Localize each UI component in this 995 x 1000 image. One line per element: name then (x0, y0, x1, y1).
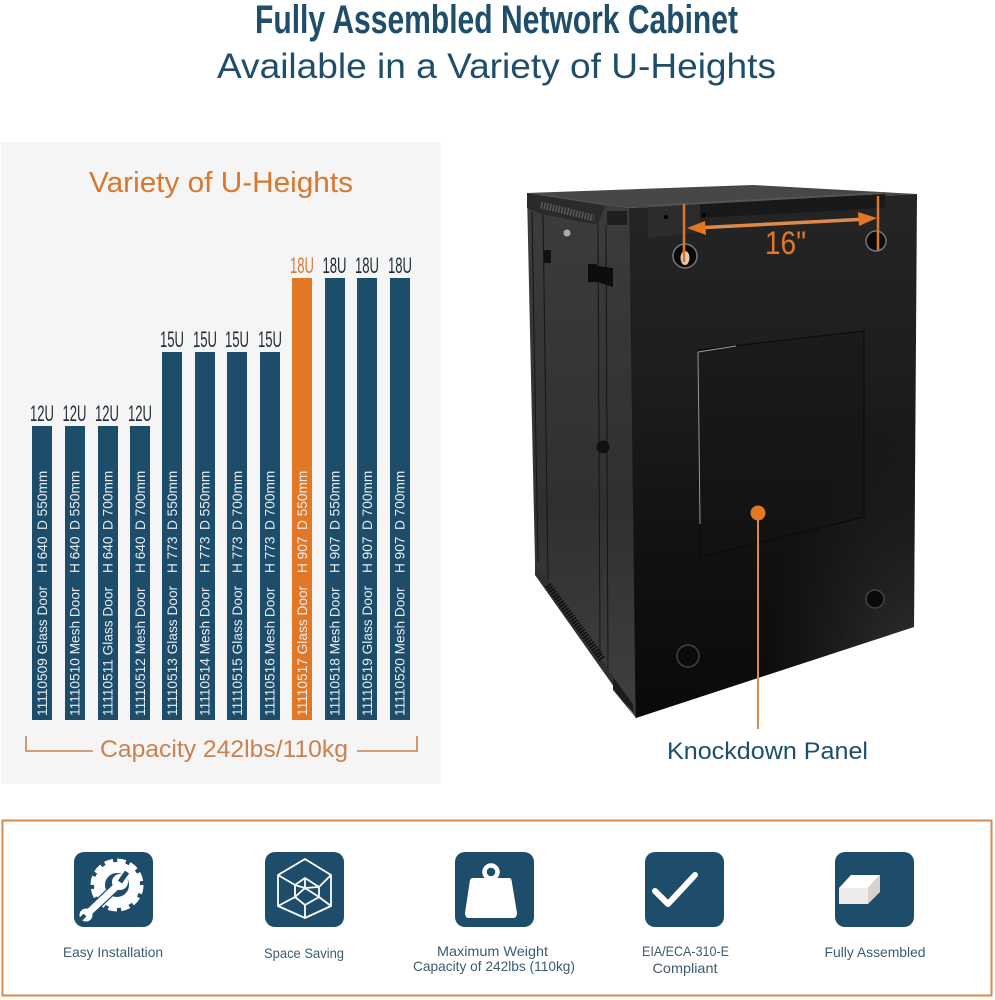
feature: space saving: Space Saving (264, 946, 344, 961)
bar: 11110517 highlighted: 18U (290, 253, 314, 278)
feature: space saving (264, 852, 344, 961)
knockdown panel (698, 331, 864, 557)
cabinet side (527, 193, 636, 718)
bar: 11110519: D 700mm (360, 471, 375, 530)
subtitle: Available in a Variety of U-Heights (217, 47, 776, 86)
bar: 11110519 (355, 253, 379, 720)
bar: 11110517 highlighted: H 907 (295, 536, 310, 573)
bar: 11110510 (62, 401, 86, 720)
mounting bracket (648, 193, 885, 238)
bar: 11110514 (193, 327, 217, 720)
icon: weight (455, 852, 534, 927)
bar: 11110509: D 550mm (35, 471, 50, 530)
bar: 11110520: D 700mm (392, 471, 408, 530)
bar: 11110516: H 773 (262, 536, 278, 573)
bar: 11110509: 12U (30, 401, 54, 426)
bar: 11110515 (225, 327, 249, 720)
bar chart (30, 253, 412, 720)
bar: 11110512: D 700mm (133, 471, 148, 530)
bar: 11110512 (128, 401, 152, 720)
feature: EIA/ECA compliance: Compliant (652, 961, 718, 976)
feature: EIA/ECA compliance (642, 852, 729, 976)
bar: 11110510: 12U (62, 401, 86, 426)
bar: 11110515: 15U (225, 327, 249, 352)
cabinet photo (527, 185, 917, 729)
feature: fully assembled (824, 852, 926, 960)
panel heading: Variety of U-Heights (89, 167, 353, 199)
bar: 11110511: D 700mm (100, 471, 116, 530)
bar: 11110509 (30, 401, 54, 720)
bar: 11110520 (388, 253, 412, 720)
bar: 11110513: H 773 (165, 536, 180, 573)
feature: maximum weight (413, 852, 575, 974)
bar: 11110515: 11110515 Glass Door (230, 585, 245, 716)
icon: gear and wrench (74, 852, 153, 927)
bar: 11110511 (95, 401, 119, 720)
bar: 11110513: 15U (160, 327, 184, 352)
bar: 11110517 highlighted (290, 253, 314, 720)
bar: 11110519: 11110519 Glass Door (360, 585, 375, 716)
feature: fully assembled: Fully Assembled (824, 945, 926, 960)
icon: box (835, 852, 914, 927)
icon: cube (265, 852, 344, 927)
bar: 11110513: 11110513 Glass Door (165, 585, 180, 716)
cabinet rear face (630, 194, 917, 718)
bar: 11110515: D 700mm (230, 471, 245, 530)
bar: 11110511: 12U (95, 401, 119, 426)
bar: 11110520: 11110520 Mesh Door (392, 587, 408, 716)
feature: EIA/ECA compliance: EIA/ECA-310-E (642, 944, 729, 959)
bar: 11110517 highlighted: 11110517 Glass Door (295, 585, 310, 716)
capacity bracket and label: Capacity 242lbs/110kg (100, 736, 348, 763)
feature: easy installation: Easy Installation (63, 945, 163, 960)
bar: 11110510: D 550mm (68, 471, 82, 530)
bar: 11110513 (160, 327, 184, 720)
bar: 11110518: D 550mm (328, 471, 342, 530)
bar: 11110509: 11110509 Glass Door (35, 585, 50, 716)
bar: 11110512: 12U (128, 401, 152, 426)
feature: maximum weight: Capacity of 242lbs (110kg) (413, 959, 575, 974)
bar: 11110515: H 773 (230, 536, 245, 573)
door knob (596, 440, 610, 454)
bar: 11110518: H 907 (328, 536, 342, 573)
bar: 11110520: 18U (388, 253, 412, 278)
mounting keyholes (673, 231, 886, 667)
bar: 11110514: 11110514 Mesh Door (198, 587, 212, 716)
bar: 11110512: 11110512 Mesh Door (133, 587, 148, 716)
panel: variety of U-heights (1, 142, 441, 784)
bar: 11110511: 11110511 Glass Door (100, 586, 116, 716)
feature: maximum weight: Maximum Weight (437, 944, 548, 959)
knockdown panel callout marker (750, 506, 766, 729)
bar: 11110511: H 640 (100, 536, 116, 573)
bar: 11110516: 11110516 Mesh Door (262, 587, 278, 716)
bar: 11110512: H 640 (133, 536, 148, 573)
bar: 11110519: 18U (355, 253, 379, 278)
panel: feature strip (2, 820, 992, 996)
bar: 11110520: H 907 (392, 536, 408, 573)
bar: 11110510: H 640 (68, 536, 82, 573)
dimension arrow: 16 inches (684, 196, 878, 262)
bar: 11110518: 11110518 Mesh Door (328, 587, 342, 716)
knockdown panel label: Knockdown Panel (667, 738, 868, 765)
bar: 11110516 (258, 327, 282, 720)
bar: 11110514: 15U (193, 327, 217, 352)
bar: 11110516: 15U (258, 327, 282, 352)
icon: check mark (645, 852, 724, 927)
bar: 11110509: H 640 (35, 536, 50, 573)
dimension arrow: 16 inches: 16" (765, 225, 806, 261)
feature: easy installation (63, 852, 163, 960)
capacity bracket and label (26, 736, 417, 763)
bar: 11110518: 18U (322, 253, 346, 278)
bar: 11110518 (322, 253, 346, 720)
bar: 11110516: D 700mm (262, 471, 278, 530)
bar: 11110519: H 907 (360, 536, 375, 573)
cabinet top (527, 185, 917, 208)
bar: 11110510: 11110510 Mesh Door (68, 587, 82, 716)
bar: 11110514: D 550mm (198, 471, 212, 530)
bar: 11110513: D 550mm (165, 471, 180, 530)
latch (588, 264, 613, 287)
bar: 11110514: H 773 (198, 536, 212, 573)
bar: 11110517 highlighted: D 550mm (295, 471, 310, 530)
